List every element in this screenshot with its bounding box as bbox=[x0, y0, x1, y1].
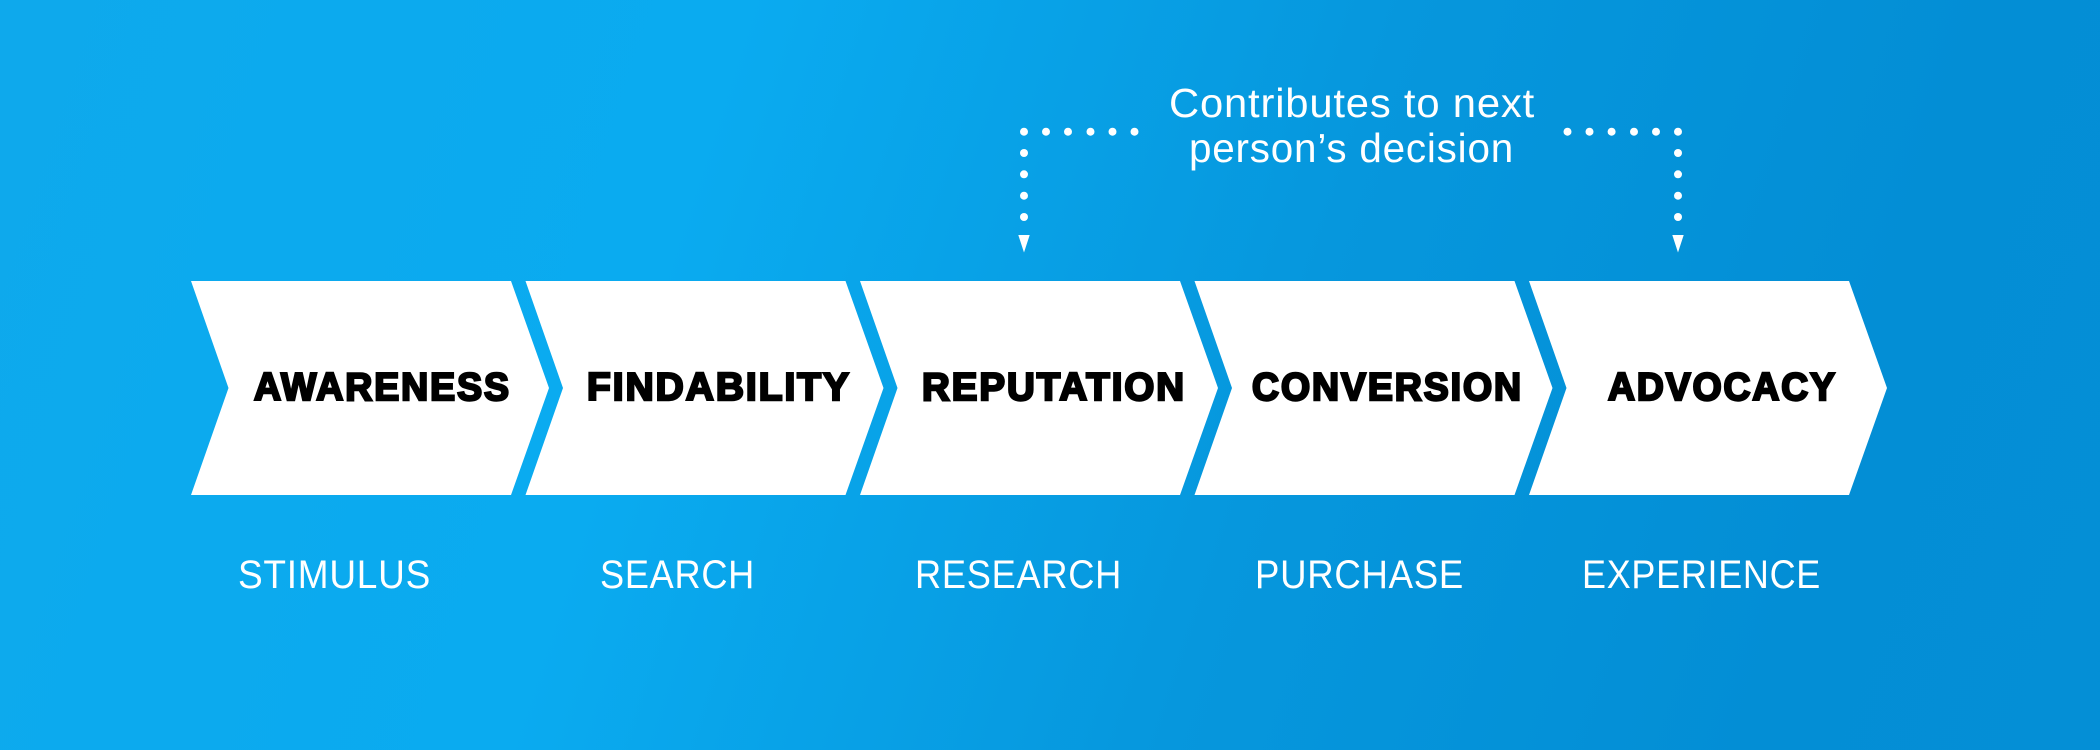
callout text: person’s decision bbox=[1189, 125, 1514, 171]
label: search: SEARCH bbox=[600, 553, 755, 597]
label: purchase: PURCHASE bbox=[1255, 553, 1464, 597]
arrow: dotted left bbox=[1018, 128, 1138, 252]
chevron: awareness: AWARENESS bbox=[254, 366, 511, 409]
chevron: awareness bbox=[191, 281, 549, 495]
chevron: conversion bbox=[1194, 281, 1552, 495]
stage labels bbox=[238, 553, 1821, 597]
chevron: findability: FINDABILITY bbox=[587, 366, 851, 409]
chevron: reputation: REPUTATION bbox=[922, 366, 1186, 409]
callout text bbox=[1169, 80, 1535, 171]
chevron: advocacy: ADVOCACY bbox=[1608, 366, 1837, 409]
chevron: findability bbox=[526, 281, 884, 495]
label: research: RESEARCH bbox=[915, 553, 1122, 597]
chevron process bbox=[191, 281, 1887, 495]
arrow: dotted right bbox=[1564, 128, 1684, 252]
chevron: reputation bbox=[860, 281, 1218, 495]
label: experience: EXPERIENCE bbox=[1582, 553, 1821, 597]
chevron: advocacy bbox=[1529, 281, 1887, 495]
label: stimulus: STIMULUS bbox=[238, 553, 431, 597]
callout text: Contributes to next bbox=[1169, 80, 1535, 126]
chevron: conversion: CONVERSION bbox=[1252, 366, 1523, 409]
